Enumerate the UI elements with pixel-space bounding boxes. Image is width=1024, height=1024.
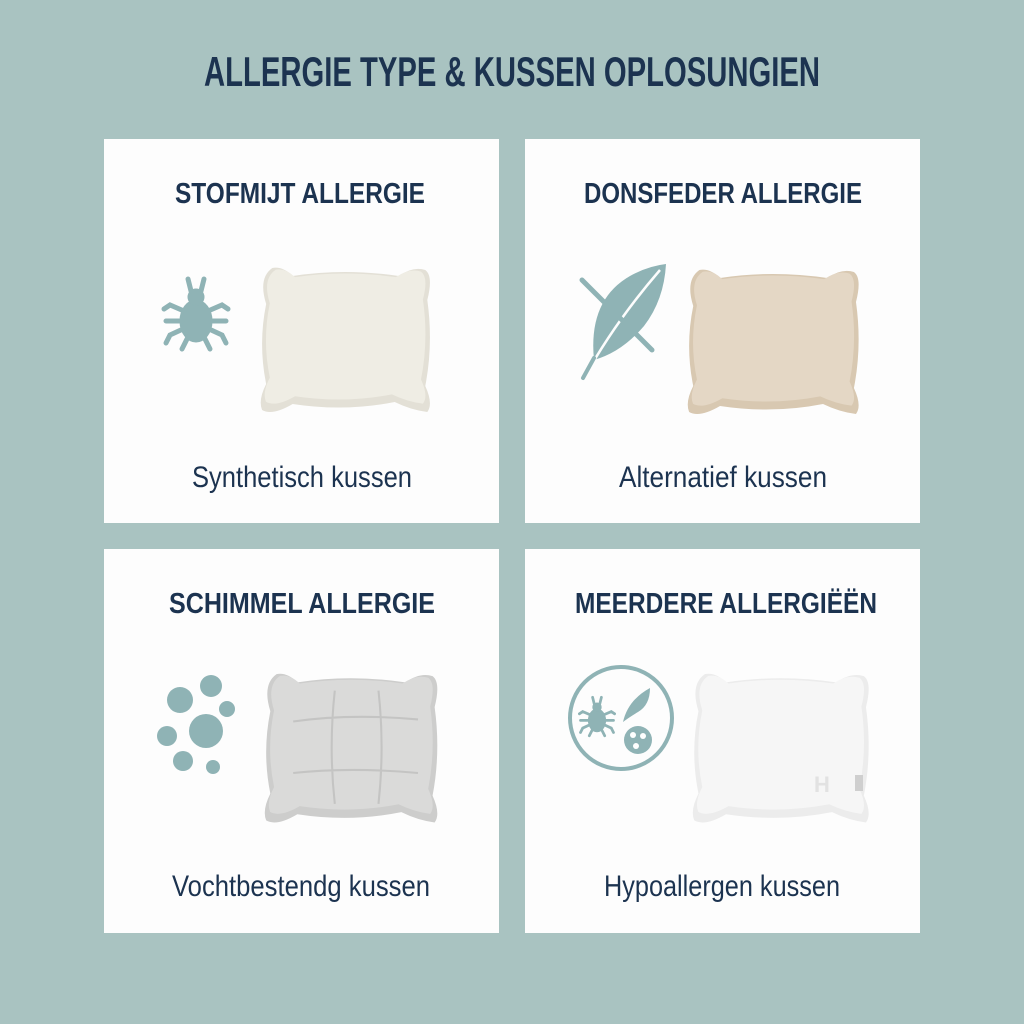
panel: schimmel bbox=[104, 549, 499, 933]
panel: donsfeder bbox=[525, 139, 920, 523]
pillow: synthetic bbox=[261, 268, 430, 412]
heading: stofmijt: STOFMIJT ALLERGIE bbox=[175, 178, 425, 210]
panel: meerdere bbox=[525, 549, 920, 933]
caption: Synthetisch kussen bbox=[192, 461, 412, 494]
caption: Alternatief kussen bbox=[619, 461, 827, 494]
pillow: alternative bbox=[688, 270, 859, 414]
caption: Vochtbestendg kussen bbox=[172, 870, 430, 903]
panel: stofmijt bbox=[104, 139, 499, 523]
heading: meerdere: MEERDERE ALLERGIËËN bbox=[575, 587, 877, 620]
icon: dust mite bbox=[164, 279, 228, 349]
pillow label H: H bbox=[814, 772, 830, 797]
heading: schimmel: SCHIMMEL ALLERGIE bbox=[169, 588, 435, 620]
icon: mold spores bbox=[157, 675, 235, 774]
icon: crossed feather bbox=[582, 264, 666, 378]
caption: Hypoallergen kussen bbox=[604, 870, 840, 903]
pillow: moisture resistant bbox=[265, 674, 437, 822]
icon: circle with allergens bbox=[570, 667, 672, 769]
pillow: hypoallergenic bbox=[693, 674, 869, 822]
heading: donsfeder: DONSFEDER ALLERGIE bbox=[584, 178, 862, 210]
